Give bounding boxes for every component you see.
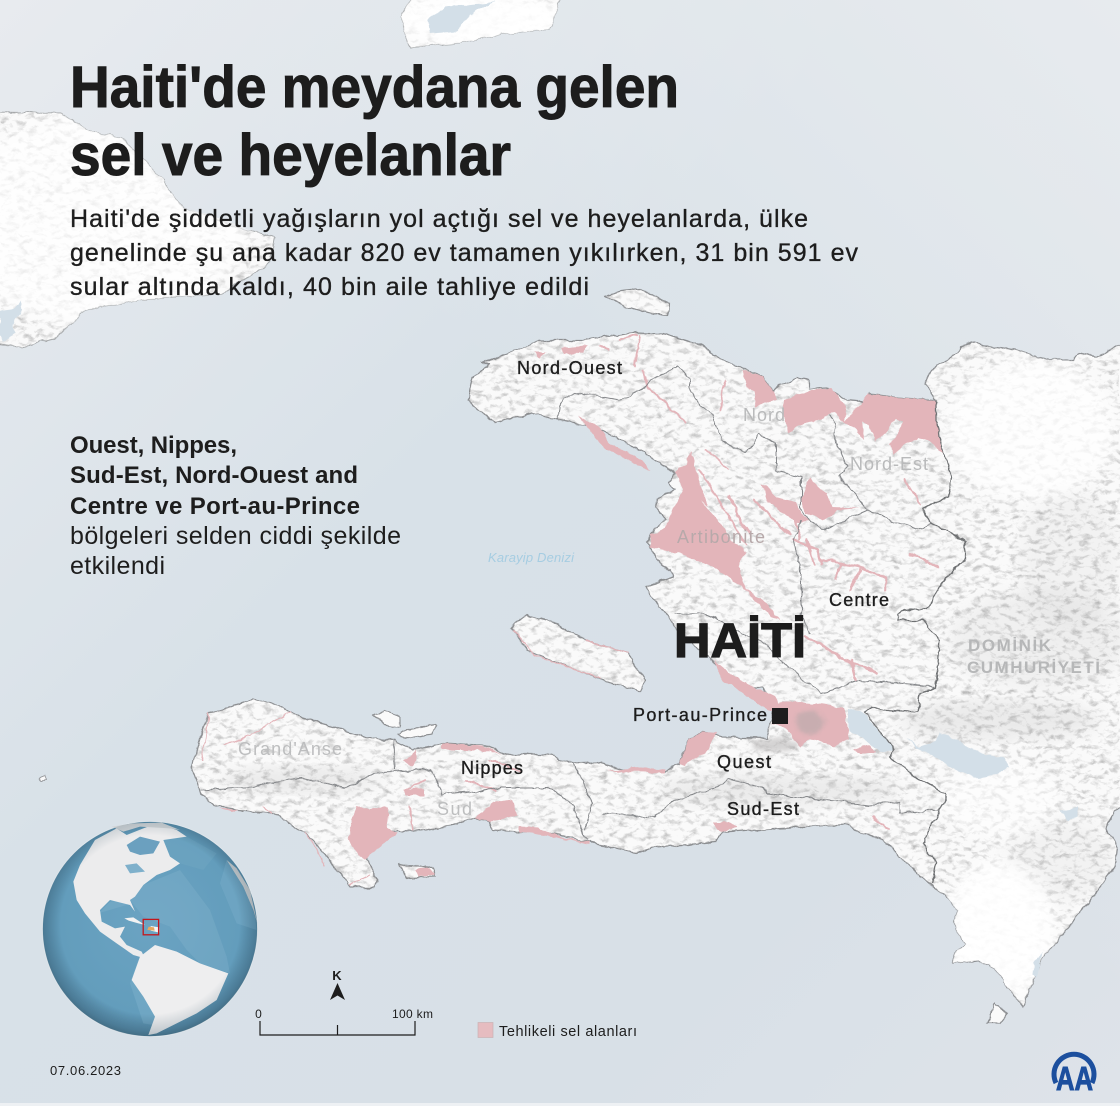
land: Tortuga island	[605, 289, 668, 316]
scale bar: 0	[255, 1007, 262, 1021]
national border Haiti / Dominican Republic	[865, 400, 965, 884]
subtitle text block	[70, 205, 858, 301]
left callout: affected regions: Centre ve Port-au-Prince	[70, 493, 360, 520]
urban area Port-au-Prince	[751, 710, 824, 752]
label: Nord: Nord	[743, 405, 785, 425]
label: Sud: Sud	[437, 799, 472, 819]
label: HAİTİ: HAİTİ	[674, 615, 806, 668]
label: Nord-Ouest: Nord-Ouest	[517, 358, 622, 378]
globe: locator square	[143, 919, 159, 935]
title: Haiti'de meydana gelen	[70, 55, 679, 120]
label: Centre: Centre	[829, 590, 889, 610]
date: 07.06.2023	[50, 1063, 121, 1078]
label: Karayip Denizi: Karayip Denizi	[488, 550, 575, 565]
label: Quest: Quest	[717, 752, 771, 772]
label: Dominik Cumhuriyeti: DOMİNİK	[968, 636, 1052, 655]
land: small cay	[40, 775, 47, 781]
flood hazard areas	[202, 335, 944, 885]
land: Cayemites islets	[374, 710, 400, 728]
left callout: affected regions: Sud-Est, Nord-Ouest and	[70, 462, 358, 489]
logo: AA: AA	[1056, 1060, 1093, 1097]
globe: Caribbean islands	[124, 917, 145, 925]
label: Dominik Cumhuriyeti: CUMHURİYETİ	[967, 658, 1100, 677]
globe: South America	[132, 945, 228, 1035]
land: northern island	[400, 0, 562, 47]
land: La Gonave island	[510, 615, 645, 692]
map labels	[238, 358, 1100, 819]
land: Gonave strait islet	[396, 725, 436, 738]
label: Nord-Est: Nord-Est	[850, 454, 928, 474]
land: Saona islet	[987, 1004, 1008, 1023]
left callout: affected regions: etkilendi	[70, 552, 165, 580]
label: Port-au-Prince: Port-au-Prince	[633, 705, 767, 725]
marker: Port-au-Prince capital	[772, 708, 788, 724]
subtitle text block: sular altında kaldı, 40 bin aile tahliye edildi	[70, 273, 589, 301]
globe: Africa and Greenland edge	[227, 860, 257, 923]
title	[70, 55, 679, 188]
label: Nippes: Nippes	[461, 758, 523, 778]
globe: North America	[73, 823, 187, 958]
title: sel ve heyelanlar	[70, 123, 511, 188]
subtitle text block: genelinde şu ana kadar 820 ev tamamen yıkılırken, 31 bin 591 ev	[70, 239, 858, 267]
left callout: affected regions: Ouest, Nippes,	[70, 432, 237, 459]
left callout: affected regions: bölgeleri selden ciddi şekilde	[70, 522, 401, 550]
globe: Great Lakes	[125, 863, 145, 873]
globe: Hudson Bay	[127, 837, 160, 855]
left callout: affected regions	[70, 432, 401, 580]
legend: flood hazard areas: Tehlikeli sel alanları	[499, 1024, 637, 1040]
department borders	[200, 367, 940, 840]
label: Grand'Anse: Grand'Anse	[238, 739, 342, 759]
subtitle text block: Haiti'de şiddetli yağışların yol açtığı sel ve heyelanlarda, ülke	[70, 205, 808, 233]
locator globe	[42, 822, 258, 1036]
globe: shelf seas	[98, 870, 230, 973]
scale bar	[255, 1007, 433, 1035]
north arrow: K	[332, 968, 342, 983]
north arrow	[330, 968, 345, 1000]
label: Sud-Est: Sud-Est	[727, 799, 799, 819]
land: eastern Cuba	[0, 112, 275, 347]
label: Artibonite: Artibonite	[677, 527, 765, 547]
land: Hispaniola	[192, 332, 1120, 1007]
logo: AA	[1054, 1054, 1094, 1097]
land: Ile a Vache	[398, 863, 435, 878]
label: Dominik Cumhuriyeti	[967, 636, 1100, 677]
scale bar: 100 km	[392, 1007, 433, 1021]
